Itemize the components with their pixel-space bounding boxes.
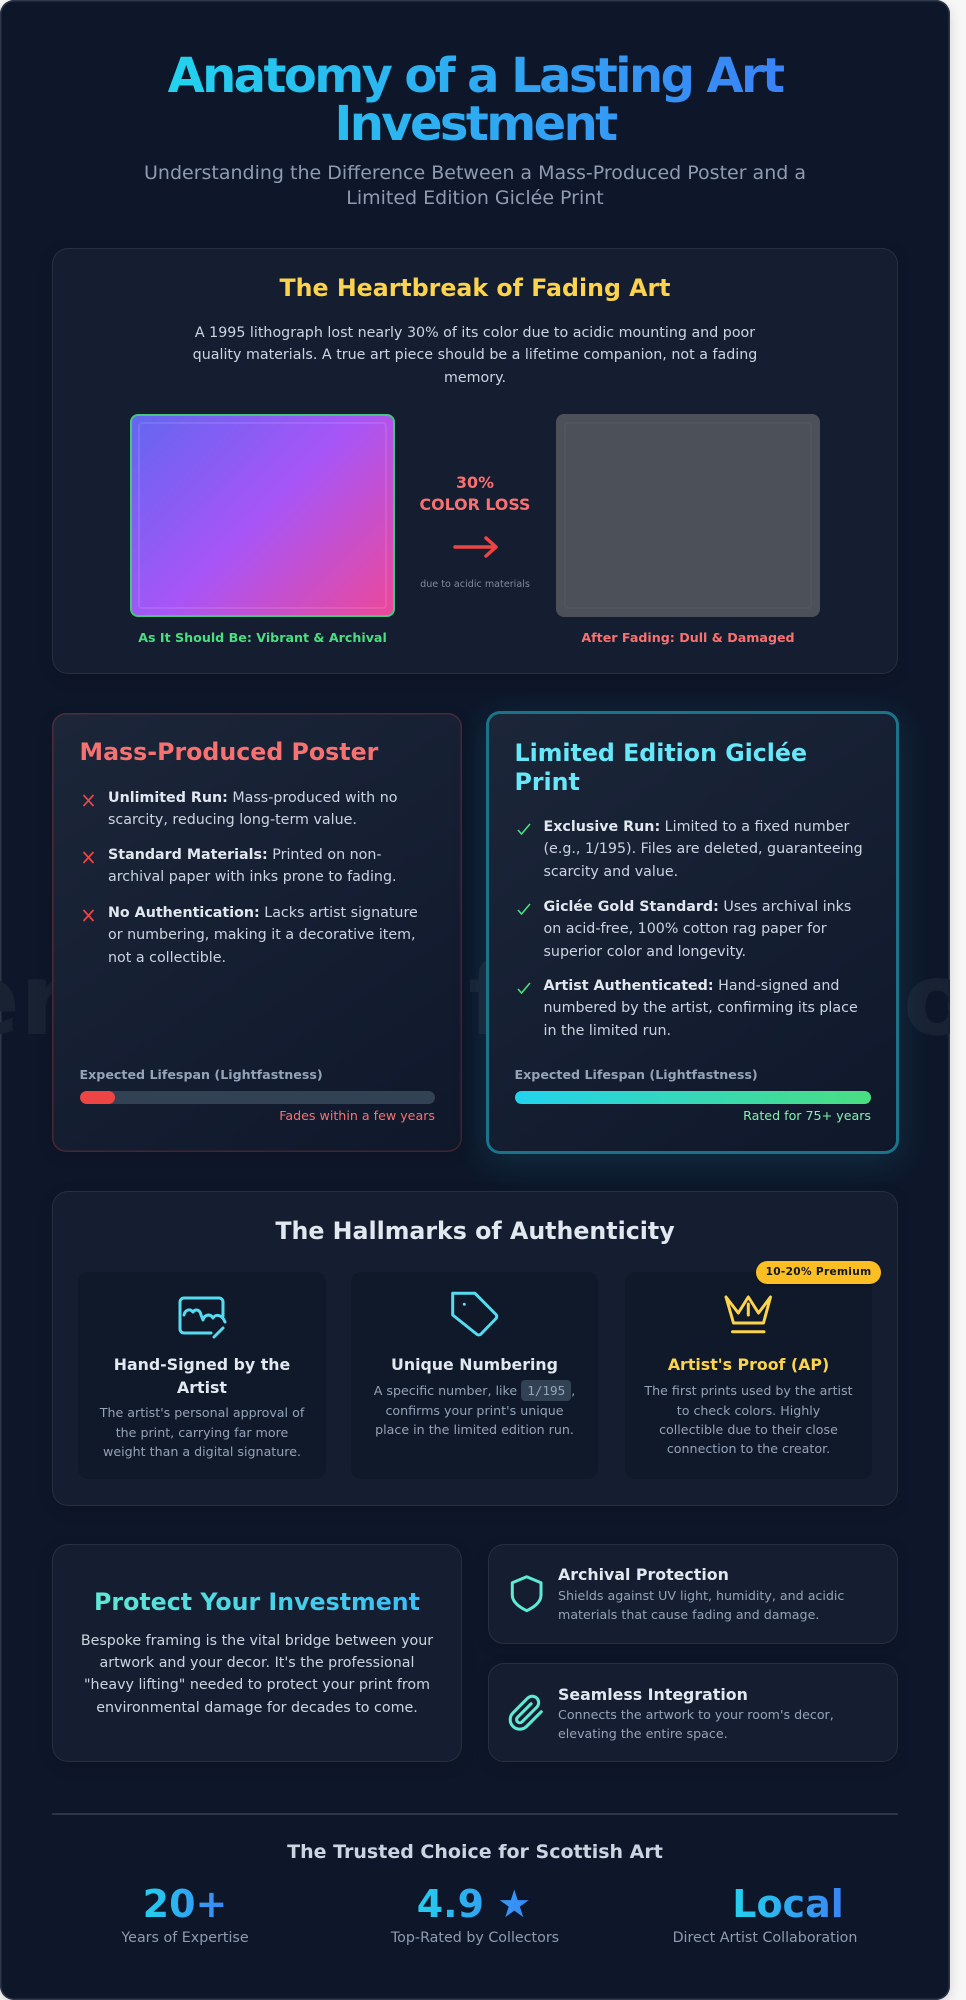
- feature text: [558, 1706, 834, 1740]
- heading: giclee: Print: [514, 768, 580, 796]
- point: giclee gold standard: superior color and longevity.: [544, 944, 746, 960]
- subtitle: Limited Edition Giclée Print: [346, 187, 604, 209]
- icon: shield: [510, 1575, 542, 1612]
- badge: premium: 10-20% Premium: [766, 1266, 871, 1278]
- icon: paperclip: [508, 1694, 543, 1731]
- panel: protect your investment: [52, 1544, 462, 1762]
- hallmark text: The first prints used by the artist: [644, 1383, 853, 1398]
- point: exclusive run: (e.g., 1/195). Files are deleted, guaranteeing: [544, 841, 863, 857]
- heading: hallmarks: The Hallmarks of Authenticity: [275, 1217, 675, 1245]
- feature title: Archival Protection: [558, 1565, 729, 1584]
- caption: faded: After Fading: Dull & Damaged: [581, 630, 795, 645]
- hallmark text: [644, 1383, 853, 1456]
- heading: giclee: [514, 738, 807, 796]
- stat: local: [673, 1882, 857, 1946]
- hallmark text: [100, 1405, 305, 1459]
- heading: giclee: Limited Edition Giclée: [514, 738, 807, 766]
- feature text: materials that cause fading and damage.: [558, 1606, 819, 1622]
- lifespan label: Expected Lifespan (Lightfastness): [514, 1067, 758, 1082]
- stat label: Top-Rated by Collectors: [391, 1930, 559, 1946]
- point: giclee gold standard: [518, 899, 851, 960]
- hallmark text: the print, carrying far more: [116, 1425, 288, 1440]
- lifespan bar: 10 percent: [80, 1091, 435, 1104]
- vibrant print image: [130, 414, 395, 617]
- stat label: Direct Artist Collaboration: [673, 1930, 857, 1946]
- watermark text fragments: f: [468, 941, 512, 1058]
- stat value: 4.9 ★: [417, 1882, 531, 1926]
- caption: vibrant: As It Should Be: Vibrant & Archival: [138, 630, 387, 645]
- point: exclusive run: Exclusive Run: Limited to a fixed number: [544, 819, 849, 835]
- hallmark text: collectible due to their close: [659, 1422, 838, 1437]
- hallmark title: Artist: [177, 1378, 227, 1396]
- feature text: Connects the artwork to your room's decor,: [558, 1706, 834, 1722]
- hallmark: unique numbering: [351, 1272, 598, 1479]
- stat: years of expertise: [121, 1882, 249, 1946]
- arrow: [453, 536, 498, 558]
- hallmark text: The artist's personal approval of: [100, 1405, 304, 1420]
- badge: premium: [756, 1261, 881, 1284]
- point: unlimited run: scarcity, reducing long-term value.: [108, 812, 357, 828]
- subtitle: [144, 162, 806, 209]
- hallmark text: confirms your print's unique: [385, 1403, 564, 1418]
- point: standard materials: [82, 847, 397, 885]
- title: Investment: [334, 96, 616, 152]
- feature title: Seamless Integration: [558, 1685, 748, 1704]
- point: artist authenticated: in the limited run.: [544, 1023, 671, 1039]
- intro paragraph: [193, 325, 757, 386]
- hallmark title: Artist's Proof (AP): [668, 1354, 829, 1374]
- panel: mass-produced poster: [52, 713, 462, 1152]
- point: no authentication: or numbering, making it a decorative item,: [108, 927, 416, 943]
- paragraph: framing: environmental damage for decades to come.: [96, 1700, 418, 1716]
- point: artist authenticated: numbered by the artist, confirming its place: [544, 1000, 858, 1016]
- stat value: Local: [732, 1882, 844, 1926]
- panel: limited edition giclee print: [486, 711, 899, 1154]
- point: exclusive run: scarcity and value.: [544, 864, 678, 880]
- heading: trusted choice: The Trusted Choice for Scottish Art: [287, 1841, 663, 1863]
- stat: rating: [390, 1882, 559, 1946]
- color loss label: [420, 473, 530, 514]
- hallmark title: Hand-Signed by the: [114, 1354, 290, 1374]
- point: unlimited run: [82, 790, 397, 828]
- icon: crown: [724, 1295, 772, 1334]
- hallmark: hand-signed: [78, 1272, 326, 1479]
- hallmark text: place in the limited edition run.: [375, 1422, 574, 1437]
- lifespan caption: Fades within a few years: [279, 1108, 435, 1123]
- icon: signature: [178, 1296, 226, 1339]
- paragraph: framing: "heavy lifting" needed to protect your print from: [84, 1677, 430, 1693]
- title: Anatomy of a Lasting Art: [168, 48, 782, 104]
- point: unlimited run: Unlimited Run: Mass-produced with no: [108, 790, 397, 806]
- point: artist authenticated: [518, 978, 858, 1039]
- hallmark title: Unique Numbering: [391, 1354, 558, 1374]
- title: [165, 52, 785, 148]
- color loss label: COLOR LOSS: [420, 495, 530, 514]
- intro paragraph: memory.: [444, 370, 506, 386]
- point: exclusive run: [518, 819, 863, 880]
- panel: the heartbreak of fading art: [52, 248, 898, 674]
- hallmark text: A specific number, like 1/195 ,: [374, 1383, 575, 1398]
- subtitle: Understanding the Difference Between a Mass-Produced Poster and a: [144, 162, 806, 184]
- lifespan caption: Rated for 75+ years: [743, 1108, 871, 1123]
- color loss label: 30%: [456, 473, 494, 492]
- point: artist authenticated: Artist Authenticated: Hand-signed and: [544, 978, 839, 994]
- heading: fading art: The Heartbreak of Fading Art: [280, 274, 670, 302]
- lifespan bar: full: [515, 1091, 871, 1104]
- feature: archival protection: [488, 1544, 898, 1644]
- cause note: due to acidic materials: [420, 579, 530, 590]
- faded print image: [556, 414, 820, 617]
- lifespan label: Expected Lifespan (Lightfastness): [80, 1067, 323, 1082]
- hallmark text: [374, 1380, 575, 1437]
- heading: protect: Protect Your Investment: [94, 1588, 420, 1616]
- point: giclee gold standard: on acid-free, 100% cotton rag paper for: [544, 921, 827, 937]
- hallmark text: connection to the creator.: [667, 1441, 830, 1456]
- paragraph: framing: Bespoke framing is the vital bridge between your: [81, 1633, 433, 1649]
- point: standard materials: archival paper with inks prone to fading.: [108, 869, 397, 885]
- point: no authentication: not a collectible.: [108, 950, 226, 966]
- heading: poster: Mass-Produced Poster: [80, 738, 378, 766]
- stat value: 20+: [143, 1882, 227, 1926]
- point: standard materials: Standard Materials: Printed on non-: [108, 847, 382, 863]
- stat label: Years of Expertise: [121, 1930, 249, 1946]
- intro paragraph: quality materials. A true art piece should be a lifetime companion, not a fading: [193, 347, 757, 363]
- hallmark text: weight than a digital signature.: [103, 1444, 301, 1459]
- panel: hallmarks of authenticity: [52, 1191, 898, 1506]
- paragraph: framing: [81, 1633, 434, 1716]
- feature: seamless integration: [488, 1663, 898, 1762]
- icon: tag: [451, 1292, 498, 1336]
- hallmark text: to check colors. Highly: [677, 1403, 820, 1418]
- point: no authentication: [82, 905, 418, 966]
- hallmark title: [114, 1354, 290, 1396]
- feature text: Shields against UV light, humidity, and acidic: [558, 1588, 844, 1602]
- feature text: elevating the entire space.: [558, 1726, 728, 1740]
- intro paragraph: A 1995 lithograph lost nearly 30% of its color due to acidic mounting and poor: [195, 325, 755, 341]
- point: no authentication: No Authentication: Lacks artist signature: [108, 905, 418, 921]
- hallmark: artist's proof: [625, 1272, 872, 1479]
- feature text: [558, 1588, 844, 1622]
- point: giclee gold standard: Giclée Gold Standard: Uses archival inks: [544, 899, 851, 915]
- paragraph: framing: artwork and your decor. It's the professional: [100, 1655, 414, 1671]
